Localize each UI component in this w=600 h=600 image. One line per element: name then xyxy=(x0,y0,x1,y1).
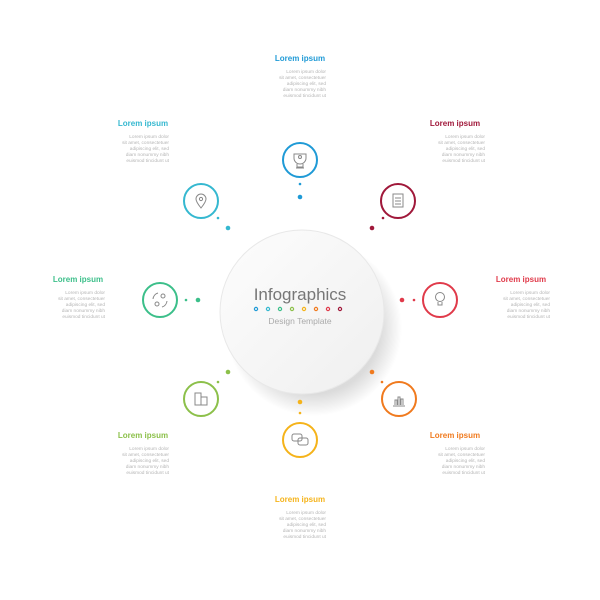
text: bottom-left xyxy=(122,446,169,476)
text: right: Lorem ipsum dolor xyxy=(510,291,550,296)
icons xyxy=(153,154,444,445)
text: top xyxy=(279,70,326,99)
text: bottom: sit amet, consectetuer xyxy=(279,517,326,522)
text: right xyxy=(503,290,550,320)
text: bottom-right: Lorem ipsum dolor xyxy=(445,447,485,452)
text: top-right: Lorem ipsum dolor xyxy=(445,135,485,140)
text: top-left: sit amet, consectetuer xyxy=(122,141,169,146)
text: top-left: Lorem ipsum dolor xyxy=(129,135,169,140)
text: top: euismod tincidunt ut xyxy=(283,94,326,99)
text: top: diam nonummy nibh xyxy=(283,88,326,93)
text: left: adipiscing elit, sed xyxy=(66,303,105,308)
text: bottom-left: sit amet, consectetuer xyxy=(122,453,169,458)
text: bottom: euismod tincidunt ut xyxy=(283,535,326,540)
label: bottom: Lorem ipsum xyxy=(275,495,325,504)
text: right: diam nonummy nibh xyxy=(507,309,550,314)
label: top-left: Lorem ipsum xyxy=(118,119,168,128)
text: bottom xyxy=(279,510,326,540)
label: top-right: Lorem ipsum xyxy=(430,119,480,128)
text: top-left: diam nonummy nibh xyxy=(126,153,169,158)
text: left: euismod tincidunt ut xyxy=(62,315,105,320)
text: bottom: adipiscing elit, sed xyxy=(287,523,326,528)
text: left: diam nonummy nibh xyxy=(62,309,105,314)
text: left: sit amet, consectetuer xyxy=(58,297,105,302)
text: bottom: Lorem ipsum dolor xyxy=(286,511,326,516)
text: top-left xyxy=(122,134,169,164)
text: bottom-left: adipiscing elit, sed xyxy=(130,459,169,464)
text: right: adipiscing elit, sed xyxy=(511,303,550,308)
text: top-right: adipiscing elit, sed xyxy=(446,147,485,152)
icon circles with dots xyxy=(143,143,457,457)
text: right: sit amet, consectetuer xyxy=(503,297,550,302)
center circle: Infographics xyxy=(254,285,346,304)
center circle xyxy=(220,230,402,416)
text: bottom-right: sit amet, consectetuer xyxy=(438,453,485,458)
center circle: Design Template xyxy=(268,316,332,326)
label: bottom-left: Lorem ipsum xyxy=(118,431,168,440)
text: bottom-right: diam nonummy nibh xyxy=(442,465,485,470)
text: top: sit amet, consectetuer xyxy=(279,76,326,81)
text: top-right xyxy=(438,134,485,164)
text: bottom-left: diam nonummy nibh xyxy=(126,465,169,470)
text: top-left: euismod tincidunt ut xyxy=(126,159,169,164)
text: bottom-right xyxy=(438,446,485,476)
text: bottom-right: euismod tincidunt ut xyxy=(442,471,485,476)
text: left: Lorem ipsum dolor xyxy=(65,291,105,296)
text: bottom: diam nonummy nibh xyxy=(283,529,326,534)
text: left xyxy=(58,290,105,320)
text: right: euismod tincidunt ut xyxy=(507,315,550,320)
text: top: Lorem ipsum dolor xyxy=(286,70,326,75)
text: top-right: diam nonummy nibh xyxy=(442,153,485,158)
text: top: adipiscing elit, sed xyxy=(287,82,326,87)
text: bottom-right: adipiscing elit, sed xyxy=(446,459,485,464)
label: right: Lorem ipsum xyxy=(496,275,546,284)
text: top-right: sit amet, consectetuer xyxy=(438,141,485,146)
text: top-right: euismod tincidunt ut xyxy=(442,159,485,164)
text: bottom-left: Lorem ipsum dolor xyxy=(129,447,169,452)
label: left: Lorem ipsum xyxy=(53,275,103,284)
label: bottom-right: Lorem ipsum xyxy=(430,431,480,440)
text: top-left: adipiscing elit, sed xyxy=(130,147,169,152)
label: top: Lorem ipsum xyxy=(275,54,325,63)
text: bottom-left: euismod tincidunt ut xyxy=(126,471,169,476)
